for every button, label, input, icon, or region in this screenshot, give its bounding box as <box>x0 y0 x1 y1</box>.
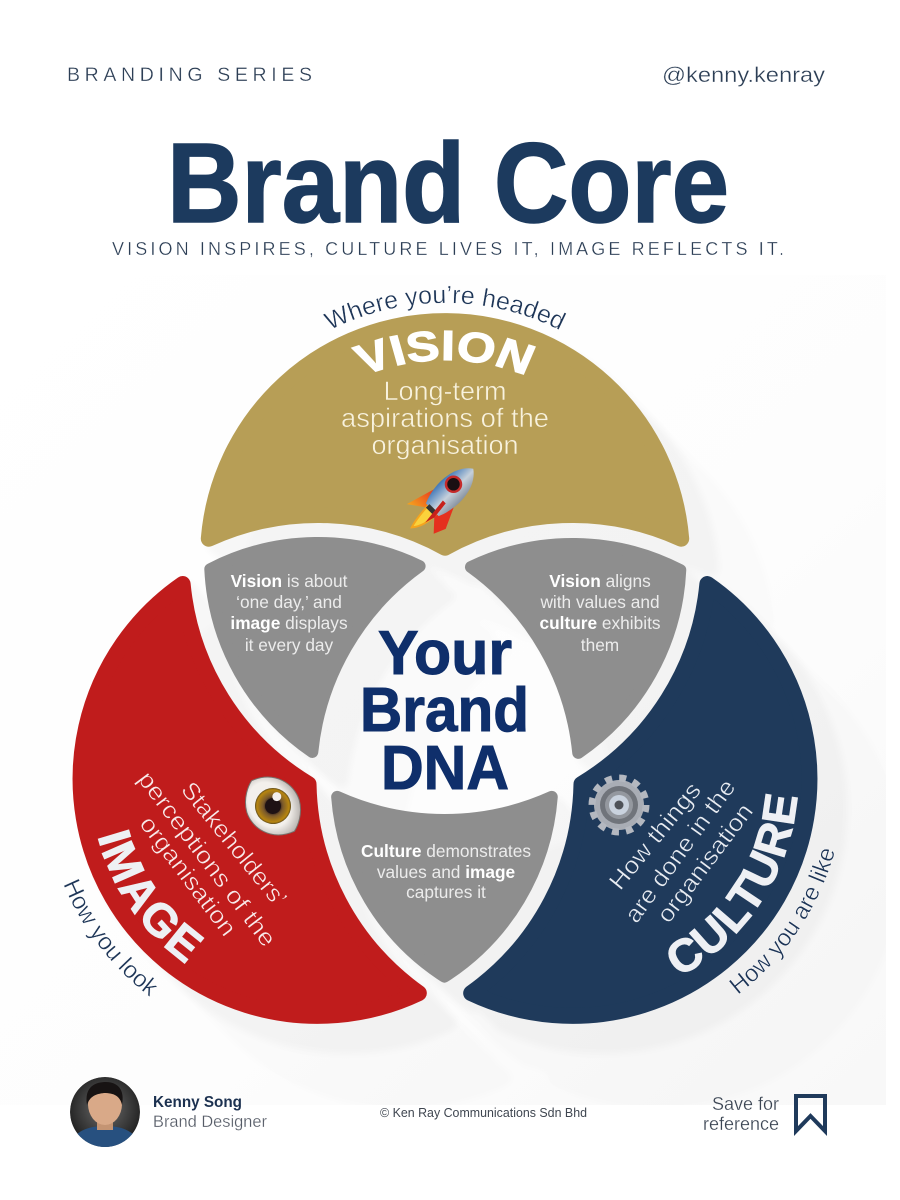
culture heading: CULTURE <box>668 794 798 972</box>
icon: gear <box>592 778 646 832</box>
overlap text bottom <box>361 841 531 902</box>
panel: image segment <box>64 576 427 1024</box>
title: Brand Core <box>167 120 729 246</box>
handle: @kenny.kenray <box>662 64 826 87</box>
overlap text right: with values and <box>539 592 660 612</box>
panel: vision segment <box>200 286 690 556</box>
overlap text bottom: Culture demonstrates <box>361 841 531 861</box>
panel: overlap vision and culture <box>417 479 703 764</box>
vision shape <box>209 321 681 548</box>
center heading: DNA <box>381 734 509 803</box>
overlap text left: Vision is about <box>231 571 348 591</box>
vision heading: VISION <box>350 330 536 375</box>
footer avatar <box>68 1077 142 1150</box>
vision description: aspirations of the <box>341 403 549 433</box>
image description: Stakeholders’ <box>175 777 292 912</box>
overlap text bottom: captures it <box>406 882 486 902</box>
save prompt: Save for <box>712 1094 779 1114</box>
footer role: Brand Designer <box>153 1112 267 1131</box>
overlap text left: image displays <box>230 613 348 633</box>
image description: organisation <box>134 811 241 942</box>
center heading: Brand <box>360 676 529 745</box>
culture description: are done in the <box>620 775 741 928</box>
image description: perceptions of the <box>132 767 281 952</box>
series label: BRANDING SERIES <box>67 64 312 86</box>
image curved caption: How you look <box>64 879 158 996</box>
overlap text left: it every day <box>245 635 334 655</box>
icon: eye <box>232 764 314 848</box>
culture shape <box>463 580 896 1102</box>
center heading: Your <box>378 619 512 688</box>
overlap text bottom: values and image <box>377 862 516 882</box>
culture curved caption: How you are like <box>729 849 834 994</box>
icon: rocket <box>398 453 490 545</box>
overlap text left: ‘one day,’ and <box>236 592 342 612</box>
panel: overlap vision and image <box>210 543 420 752</box>
overlap text right: culture exhibits <box>539 613 661 633</box>
culture description: How things <box>604 777 707 895</box>
overlap text right <box>539 571 661 655</box>
vision curved caption: Where you’re headed <box>322 286 566 330</box>
vision description: organisation <box>371 430 519 460</box>
save prompt <box>703 1094 779 1134</box>
overlap text right: them <box>581 635 619 655</box>
overlap text right: Vision aligns <box>549 571 651 591</box>
overlap shape bottom <box>317 704 603 990</box>
center heading <box>360 619 529 803</box>
icon: bookmark <box>796 1096 825 1131</box>
overlap text left <box>230 571 348 655</box>
subtitle: VISION INSPIRES, CULTURE LIVES IT, IMAGE REFLECTS IT. <box>112 239 784 259</box>
culture description: organisation <box>652 798 759 928</box>
image heading: IMAGE <box>98 829 204 964</box>
panel: overlap culture and image <box>317 704 603 990</box>
overlap shape right <box>417 479 703 764</box>
vision description <box>341 376 549 460</box>
save prompt: reference <box>703 1114 779 1134</box>
footer name: Kenny Song <box>153 1094 242 1111</box>
image shape <box>0 580 427 1102</box>
vision description: Long-term <box>383 376 507 406</box>
panel: culture segment <box>463 576 834 1024</box>
copyright: © Ken Ray Communications Sdn Bhd <box>380 1105 587 1120</box>
background panel with long soft shadows <box>168 408 886 1105</box>
overlap shape left <box>210 543 420 752</box>
